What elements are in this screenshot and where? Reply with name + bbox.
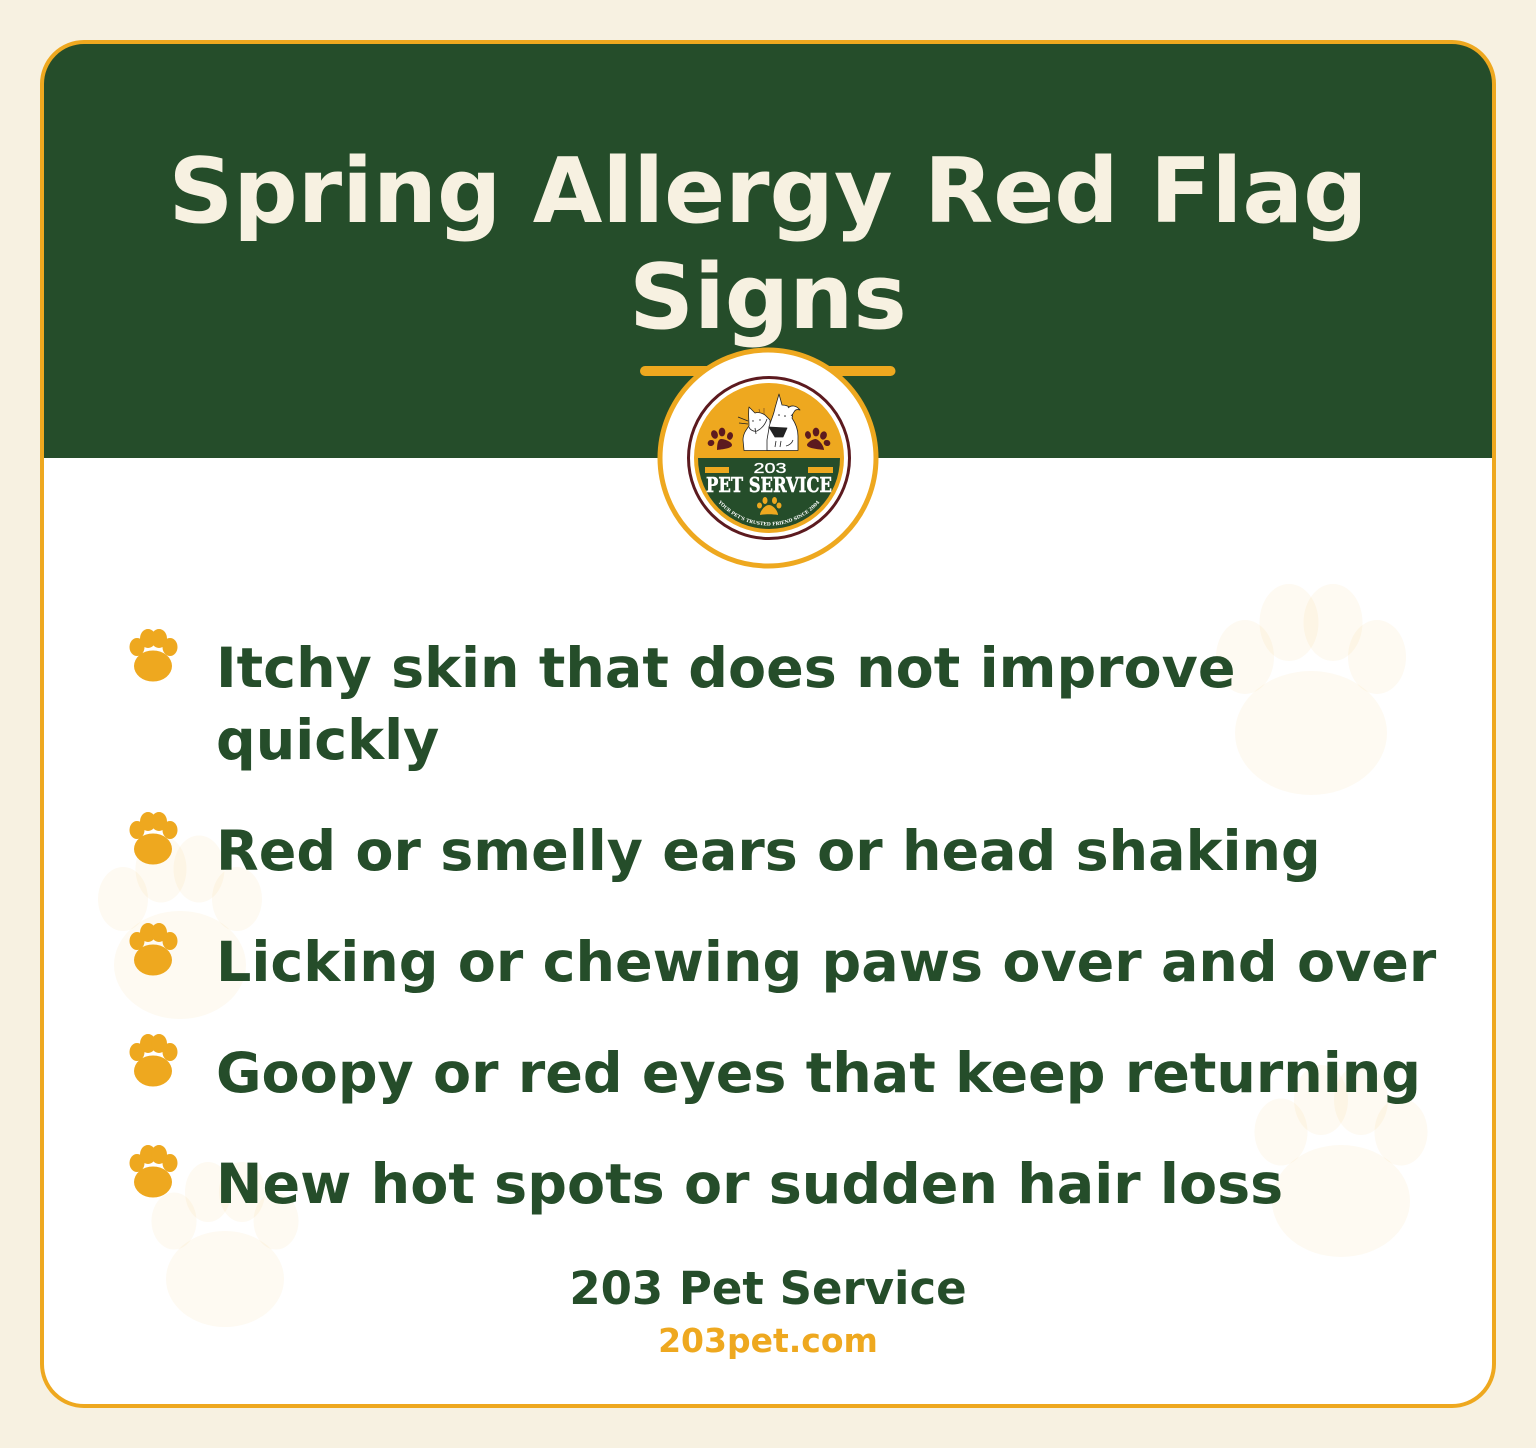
icon: paw bullet — [130, 1145, 178, 1198]
title — [168, 139, 1368, 350]
logo badge — [658, 348, 878, 568]
icon: left paw — [707, 428, 734, 450]
header band — [42, 42, 1494, 458]
logo text: tagline: YOUR PET'S TRUSTED FRIEND SINCE 2004 — [718, 500, 820, 526]
list item 2 — [130, 812, 1321, 884]
title underline — [640, 366, 896, 376]
icon: paw bullet — [130, 1034, 178, 1086]
item text: Licking or chewing paws over and over — [216, 930, 1437, 995]
title: Spring Allergy Red Flag — [168, 139, 1368, 244]
watermark paw: middle left — [98, 836, 262, 1019]
watermark paw: top right — [1216, 584, 1406, 795]
list item 4 — [130, 1034, 1421, 1106]
title: Signs — [629, 245, 907, 350]
list item 5 — [130, 1145, 1283, 1217]
maroon ring — [688, 378, 850, 538]
item text: Itchy skin that does not improve — [216, 636, 1236, 701]
item text: New hot spots or sudden hair loss — [216, 1152, 1283, 1217]
item text: Red or smelly ears or head shaking — [216, 819, 1321, 884]
logo text: 203: 203 — [754, 460, 786, 477]
icon: cat — [738, 407, 770, 450]
item text: quickly — [216, 708, 439, 773]
icon: dog — [767, 394, 800, 450]
item text — [216, 636, 1236, 773]
icon: paw bullet — [130, 629, 178, 682]
watermark paw: bottom right — [1254, 1065, 1428, 1257]
icon: band paw — [757, 497, 782, 515]
watermark paw: bottom left — [152, 1162, 298, 1327]
footer brand name: 203 Pet Service — [569, 1262, 967, 1315]
icon: right paw — [804, 428, 831, 450]
list item 3 — [130, 923, 1437, 995]
gold disc — [694, 383, 844, 533]
item text: Goopy or red eyes that keep returning — [216, 1041, 1421, 1106]
logo text: PET SERVICE: PET SERVICE — [706, 473, 832, 497]
badge circle — [660, 350, 876, 566]
green band — [698, 458, 840, 529]
footer website: 203pet.com — [658, 1321, 878, 1360]
list item 1 — [130, 629, 1236, 773]
icon: paw bullet — [130, 812, 178, 864]
logo bars — [705, 467, 833, 473]
icon: paw bullet — [130, 923, 178, 976]
